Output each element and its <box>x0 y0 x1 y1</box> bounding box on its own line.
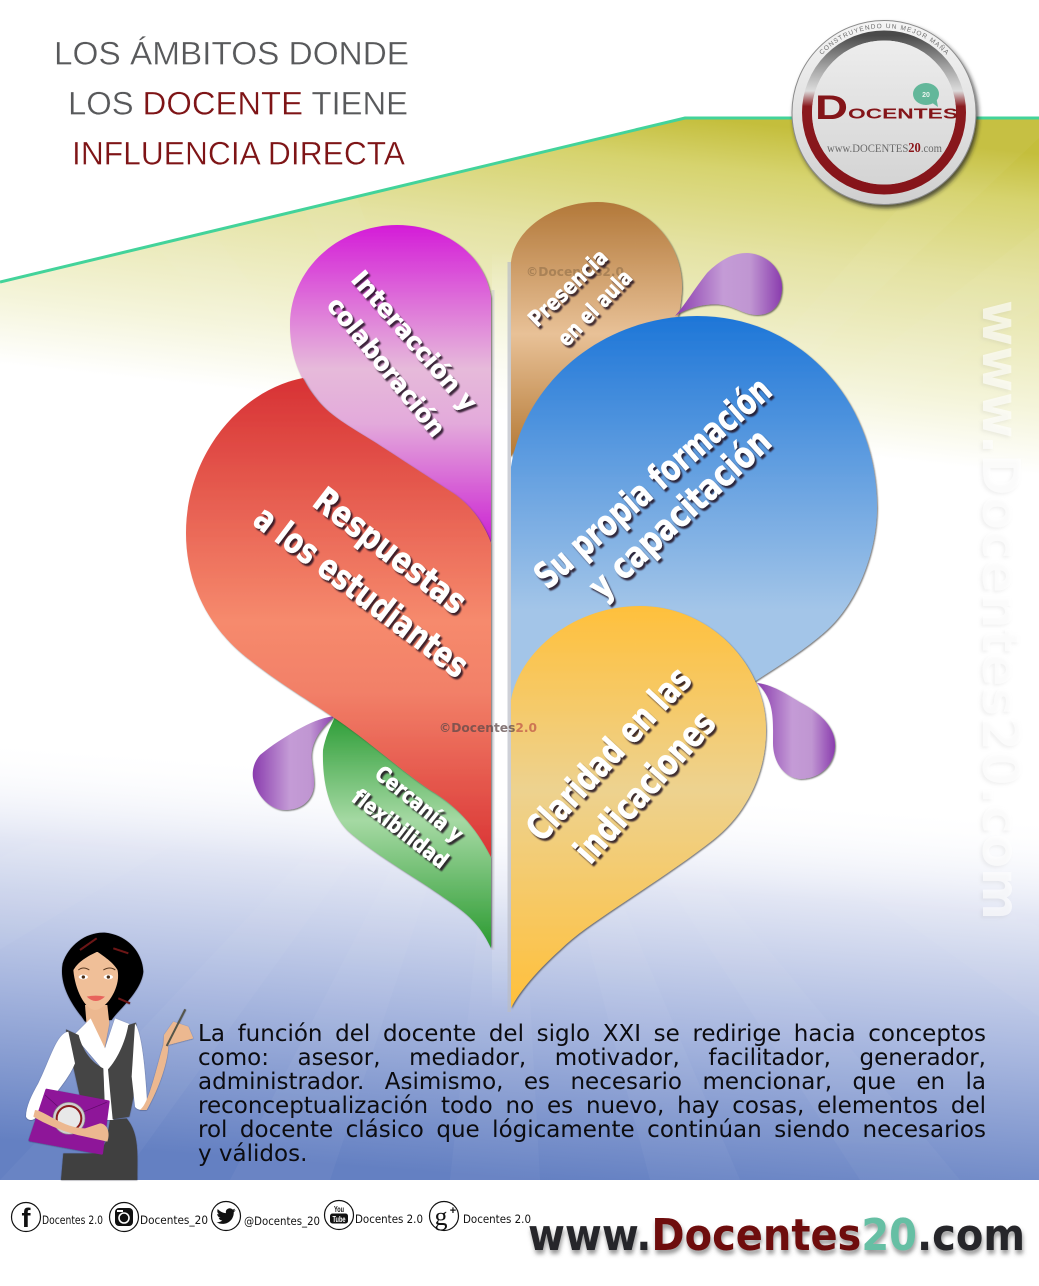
label: presencia en el aula: en el aula <box>553 265 638 352</box>
label: claridad en las indicaciones <box>519 659 724 872</box>
diagram: influence heart <box>186 202 877 1012</box>
body text: rol docente clásico que lógicamente continúan siendo necesarios <box>198 1117 986 1143</box>
body text: reconceptualización todo no es nuevo, hay cosas, elementos del <box>198 1093 986 1119</box>
blouse <box>74 1018 129 1120</box>
watermark: centre: ©Docentes2.0 <box>439 720 537 735</box>
left sleeve <box>26 1032 75 1120</box>
body text: y válidos. <box>198 1141 307 1167</box>
icon: google plus: g <box>434 1202 448 1231</box>
logo wordmark: OCENTES <box>848 106 958 122</box>
centre divider <box>492 250 511 1012</box>
vertical website watermark: www.Docentes20.com <box>970 300 1030 920</box>
label: respuestas a los estudiantes: Respuestas <box>305 480 474 623</box>
label: interaccion y colaboracion: Interacción y <box>346 265 483 417</box>
vest <box>66 1029 105 1119</box>
logo wordmark: D <box>815 89 848 127</box>
body text: La función del docente del siglo XXI se redirige hacia conceptos <box>198 1021 986 1047</box>
hair <box>62 933 143 1022</box>
face <box>72 938 130 1010</box>
petal: presencia en el aula <box>511 202 682 457</box>
watermark: tan petal: ©Docentes2.0 <box>526 264 624 279</box>
label: facebook: Docentes 2.0 <box>42 1213 103 1227</box>
body text: como: asesor, mediador, motivador, facilitador, generador, <box>198 1045 986 1071</box>
title line 2: LOS DOCENTE TIENE <box>68 86 408 122</box>
icon: twitter <box>212 1202 240 1230</box>
forearm and hand <box>139 1022 193 1110</box>
label: claridad en las indicaciones: indicaciones <box>566 703 724 872</box>
label: claridad en las indicaciones: Claridad en las <box>519 659 700 849</box>
holding arm <box>33 1110 109 1142</box>
icon: google plus <box>430 1202 458 1231</box>
logo url: www.DOCENTES20.com <box>827 141 943 156</box>
label: google plus: Docentes 2.0 <box>463 1212 531 1226</box>
icon: chat bubble <box>913 83 939 107</box>
pointer <box>167 1009 185 1046</box>
petal: claridad <box>511 606 766 1008</box>
body text: administrador. Asimismo, es necesario mencionar, que en la <box>198 1069 986 1095</box>
icon: youtube: Tube <box>332 1215 346 1224</box>
body text <box>198 1021 986 1167</box>
folder <box>30 1090 108 1153</box>
drop: top right <box>675 253 782 316</box>
icon: youtube: You <box>334 1205 344 1214</box>
label: respuestas a los estudiantes: a los estudiantes <box>246 499 476 686</box>
label: su propia formacion y capacitacion: Su propia formación <box>527 369 780 597</box>
label: instagram: Docentes_20 <box>140 1213 208 1227</box>
petal: respuestas <box>186 378 491 857</box>
icon: chat bubble: 20 <box>922 92 930 99</box>
website url: www.Docentes20.com <box>528 1210 1025 1261</box>
icon: instagram <box>110 1202 138 1232</box>
petal: interaccion <box>290 225 491 543</box>
label: interaccion y colaboracion: colaboración <box>321 291 451 442</box>
icon: youtube <box>324 1200 354 1230</box>
drop: lower left <box>253 716 335 810</box>
label: respuestas a los estudiantes <box>246 480 476 686</box>
social row <box>12 1200 531 1233</box>
label: cercania y flexibilidad <box>347 762 468 874</box>
label: presencia en el aula <box>524 245 638 352</box>
icon: google plus: + <box>450 1205 456 1217</box>
label: su propia formacion y capacitacion <box>527 369 780 608</box>
icon: facebook: f <box>22 1203 32 1233</box>
label: twitter: @Docentes_20 <box>244 1214 320 1228</box>
label: presencia en el aula: Presencia <box>524 245 613 332</box>
title line 3: INFLUENCIA DIRECTA <box>72 136 406 172</box>
right sleeve <box>132 1023 147 1110</box>
icon: facebook <box>12 1202 40 1233</box>
logo wordmark <box>815 89 958 127</box>
label: youtube: Docentes 2.0 <box>355 1212 423 1226</box>
illustration: teacher <box>26 933 193 1180</box>
title line 1: LOS ÁMBITOS DONDE <box>54 36 409 72</box>
drop: lower right <box>757 683 835 779</box>
logo badge <box>790 20 982 212</box>
petal: formacion <box>511 316 877 720</box>
neck <box>85 1005 109 1052</box>
label: cercania y flexibilidad: Cercanía y <box>369 762 468 848</box>
title <box>54 36 409 172</box>
skirt <box>61 1118 137 1180</box>
label: su propia formacion y capacitacion: y capacitación <box>581 421 780 608</box>
petal: cercania <box>323 717 491 948</box>
label: cercania y flexibilidad: flexibilidad <box>347 785 452 874</box>
